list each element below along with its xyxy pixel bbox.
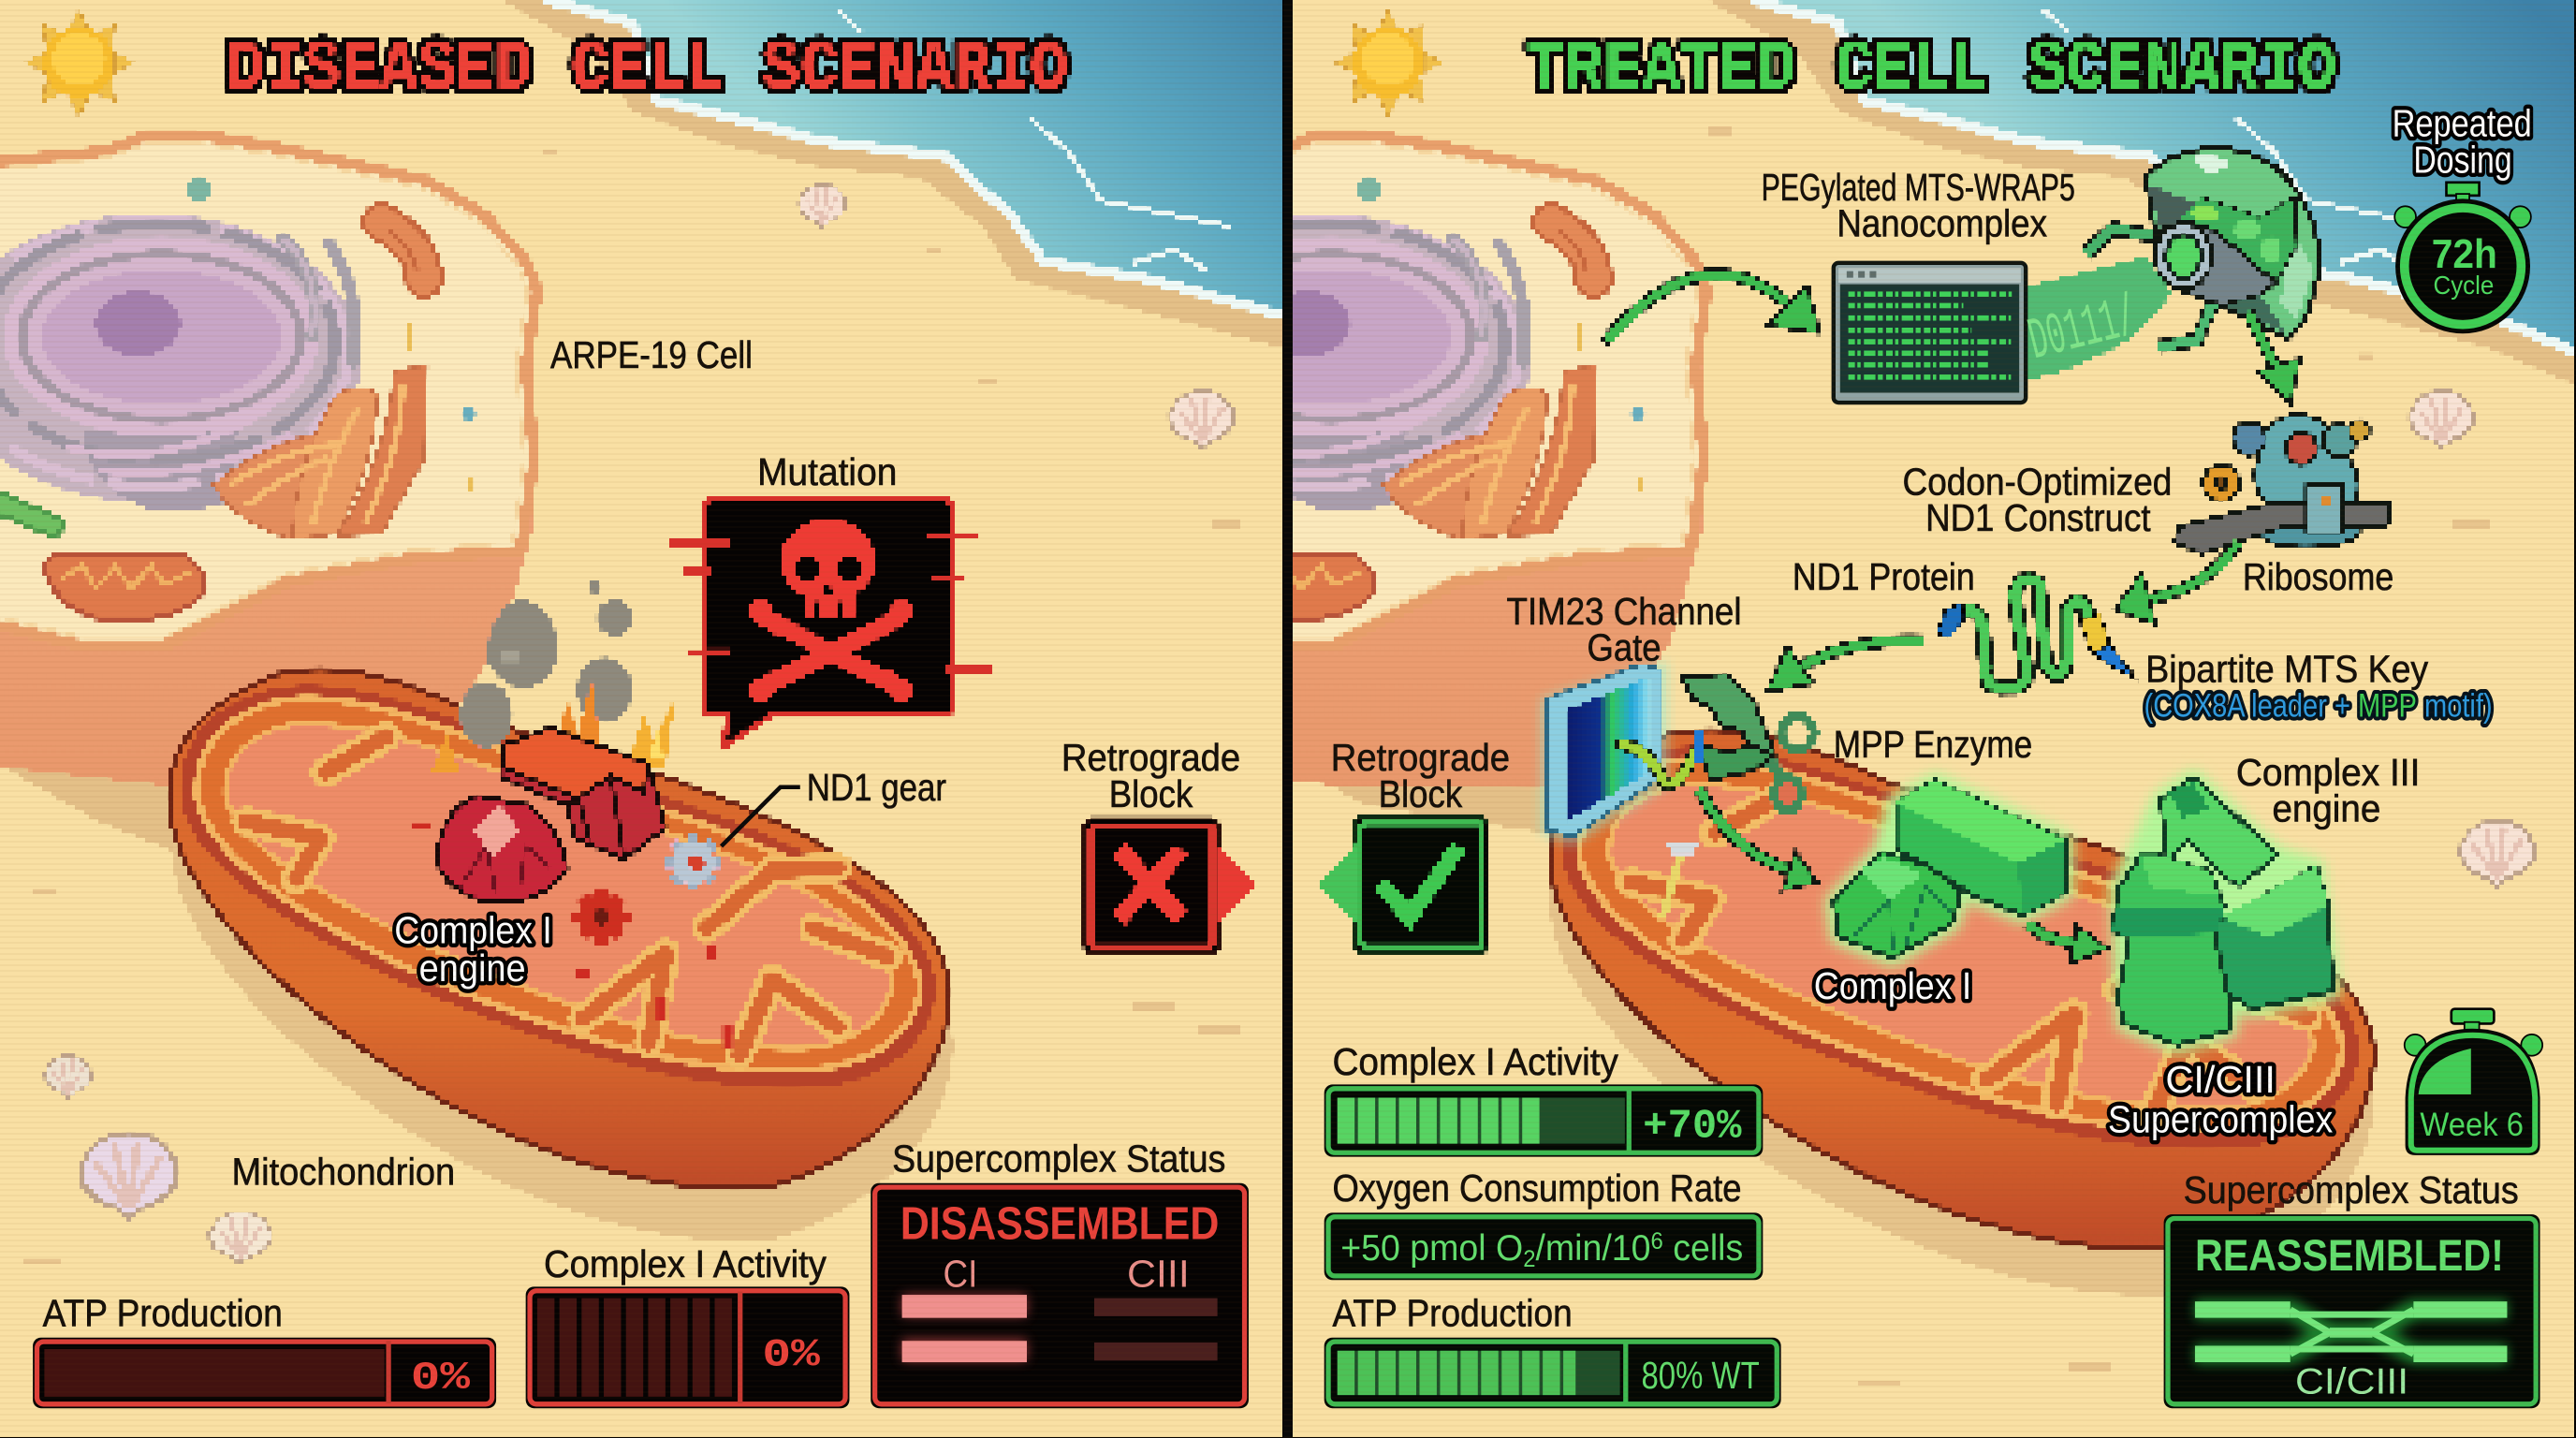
label: supercomplex status: Supercomplex Status bbox=[892, 1137, 1225, 1180]
green CI/CIII supercomplex bbox=[2113, 777, 2333, 1045]
flames bbox=[431, 681, 675, 772]
panel: treated cell scene art bbox=[1071, 0, 2576, 1438]
HUD: supercomplex status (disassembled) bbox=[871, 1183, 1249, 1408]
label: Complex III engine bbox=[2236, 751, 2420, 830]
HUD: ATP production (treated): 80% WT bbox=[1641, 1354, 1760, 1397]
HUD: supercomplex status (reassembled) bbox=[2164, 1214, 2540, 1408]
label: supercomplex status: Supercomplex Status bbox=[2184, 1168, 2519, 1211]
seashells bbox=[44, 183, 1237, 1266]
label: mutation: Mutation bbox=[757, 450, 897, 493]
HUD: supercomplex status (reassembled): REASSEMBLED! bbox=[2195, 1231, 2504, 1281]
arrow: cell to terminal bbox=[1608, 274, 1821, 339]
label: ARPE-19 cell: ARPE-19 Cell bbox=[550, 333, 753, 376]
label: TIM23 channel gate: Gate bbox=[1588, 626, 1661, 669]
label: Complex III engine: engine bbox=[2272, 787, 2380, 830]
protein threading through gate bbox=[1621, 731, 1705, 785]
label: COX8A leader + MPP motif: (COX8A leader + MPP motif) bbox=[2144, 687, 2493, 724]
damage sparks bbox=[411, 822, 733, 1050]
broken Complex I engine bbox=[437, 728, 666, 902]
HUD: ATP production (diseased): 0% bbox=[411, 1356, 471, 1401]
label: retrograde block bbox=[1061, 736, 1240, 815]
mitochondrion bbox=[168, 669, 950, 1188]
icon: 72h cycle stopwatch: 72h bbox=[2432, 231, 2497, 277]
icon: 72h cycle stopwatch: Cycle bbox=[2433, 271, 2494, 300]
leader line: ND1 gear bbox=[722, 787, 800, 846]
icon: mutation speech bubble with skull bbox=[670, 500, 990, 748]
icon: week 6 stopwatch: Week 6 bbox=[2420, 1107, 2524, 1143]
nanobot WRAP5 nanocomplex bbox=[2085, 148, 2320, 346]
sand marks bbox=[1708, 128, 2489, 1387]
shoreline and water bbox=[505, 0, 1282, 346]
bipartite key tips bbox=[1937, 603, 2138, 681]
HUD: Complex I activity (diseased) bbox=[526, 1286, 849, 1408]
label: retrograde block: Retrograde bbox=[1331, 736, 1510, 779]
data ribbon bbox=[2027, 257, 2172, 379]
label: Complex III engine: Complex III bbox=[2236, 751, 2420, 794]
HUD: oxygen consumption rate: /min/10 bbox=[1535, 1228, 1651, 1269]
HUD: supercomplex status (reassembled): CI/CIII bbox=[2295, 1361, 2408, 1401]
label: PEGylated MTS-WRAP5 nanocomplex bbox=[1762, 166, 2075, 245]
green glow behind complexes bbox=[1834, 777, 2333, 1045]
label: codon-optimized ND1 construct: Codon-Optimized bbox=[1903, 460, 2172, 503]
icon: sun bbox=[1336, 10, 1442, 117]
arrow: ribosome to protein bbox=[2115, 542, 2238, 624]
label: PEGylated MTS-WRAP5 nanocomplex: Nanocomplex bbox=[1837, 202, 2047, 245]
label: repeated dosing: Repeated bbox=[2393, 102, 2532, 145]
mitochondrion bbox=[1550, 730, 2374, 1249]
icon: ND1 gear bbox=[666, 835, 722, 890]
HUD: oxygen consumption rate: +50 pmol O bbox=[1340, 1228, 1529, 1269]
arrow: protein to gate bbox=[1766, 640, 1924, 692]
HUD: Complex I activity (diseased): 0% bbox=[762, 1333, 821, 1378]
label: Complex I engine bbox=[394, 908, 552, 990]
green Complex I bbox=[1834, 781, 2065, 958]
sand marks bbox=[24, 148, 1242, 1264]
ground shadow of cell bbox=[1281, 723, 1577, 838]
HUD: ATP production (treated) bbox=[1325, 1338, 1781, 1408]
label: ATP production: ATP Production bbox=[1332, 1291, 1573, 1334]
label: Complex I activity: Complex I Activity bbox=[1332, 1040, 1619, 1083]
label: Complex I: Complex I bbox=[1814, 964, 1971, 1007]
label: repeated dosing: Dosing bbox=[2413, 138, 2512, 181]
label: retrograde block: Retrograde bbox=[1061, 736, 1240, 779]
HUD: oxygen consumption rate: 2 bbox=[1523, 1247, 1535, 1272]
panel: diseased cell scene art bbox=[0, 0, 1282, 1437]
HUD: Complex I activity (treated): +70% bbox=[1643, 1104, 1742, 1151]
smoke bbox=[460, 580, 633, 748]
label: codon-optimized ND1 construct: ND1 Construct bbox=[1925, 496, 2151, 539]
HUD: supercomplex status (disassembled): CIII bbox=[1127, 1252, 1190, 1295]
icon: retrograde block X bbox=[1084, 818, 1257, 953]
label: TIM23 channel gate: TIM23 Channel bbox=[1507, 590, 1742, 633]
HUD: ATP production (diseased) bbox=[33, 1338, 496, 1408]
HUD: supercomplex status (disassembled): CI bbox=[943, 1252, 977, 1295]
icon: sun bbox=[26, 10, 133, 117]
HUD: oxygen consumption rate: cells bbox=[1663, 1228, 1743, 1269]
HUD: oxygen consumption rate: 6 bbox=[1651, 1229, 1663, 1255]
HUD: Complex I activity (treated) bbox=[1325, 1084, 1763, 1157]
label: retrograde block bbox=[1331, 736, 1510, 815]
terminal screen bbox=[1834, 263, 2026, 403]
label: Complex I engine: engine bbox=[419, 946, 526, 990]
mitochondrion shadow bbox=[173, 852, 955, 1240]
icon: broken red gear bbox=[572, 888, 631, 946]
label: PEGylated MTS-WRAP5 nanocomplex: PEGylated MTS-WRAP5 bbox=[1762, 166, 2075, 209]
arrow: nanobot to ribosome bbox=[2247, 312, 2300, 406]
label: ATP production: ATP Production bbox=[43, 1291, 283, 1334]
label: Complex I engine: Complex I bbox=[394, 908, 552, 951]
ARPE-19 cell bbox=[1071, 135, 1707, 788]
shoreline and water bbox=[1707, 0, 2576, 411]
label: mitochondrion: Mitochondrion bbox=[231, 1150, 455, 1193]
label: MPP enzyme: MPP Enzyme bbox=[1834, 723, 2032, 766]
label: retrograde block: Block bbox=[1109, 772, 1193, 815]
label: ND1 protein: ND1 Protein bbox=[1793, 555, 1975, 598]
seashells bbox=[2408, 389, 2537, 888]
label: repeated dosing bbox=[2393, 102, 2532, 181]
tim23 channel gate bbox=[1541, 661, 1668, 844]
ground shadow of cell bbox=[9, 768, 173, 852]
label: CI/CIII supercomplex: Supercomplex bbox=[2108, 1097, 2333, 1140]
HUD: oxygen consumption rate bbox=[1325, 1212, 1763, 1280]
ARPE-19 cell bbox=[0, 135, 537, 788]
label: oxygen consumption rate: Oxygen Consumption Rate bbox=[1332, 1167, 1742, 1210]
mitochondrion shadow bbox=[1550, 776, 2374, 1296]
label: Complex I activity: Complex I Activity bbox=[544, 1242, 827, 1285]
divider between panels bbox=[1283, 0, 1293, 1438]
icon: retrograde block check bbox=[1318, 816, 1488, 953]
label: codon-optimized ND1 construct bbox=[1903, 460, 2172, 539]
ribbon binary text: D0111/ bbox=[2022, 285, 2144, 376]
title: treated: TREATED CELL SCENARIO bbox=[1527, 30, 2336, 111]
nd1 protein strand bbox=[1955, 579, 2097, 687]
label: CI/CIII supercomplex: CI/CIII bbox=[2165, 1058, 2276, 1101]
mpp enzyme scissors bbox=[1682, 674, 1814, 810]
label: ND1 gear: ND1 gear bbox=[807, 766, 946, 809]
ribosome with construct belt bbox=[2174, 414, 2391, 554]
arrow: gate to Complex I bbox=[1699, 788, 1817, 890]
arrow: Complex I to supercomplex bbox=[2027, 923, 2108, 964]
label: TIM23 channel gate bbox=[1507, 590, 1742, 669]
label: ribosome: Ribosome bbox=[2243, 555, 2393, 598]
label: bipartite MTS key: Bipartite MTS Key bbox=[2145, 647, 2429, 690]
label: retrograde block: Block bbox=[1379, 772, 1463, 815]
small repair tool bbox=[1662, 842, 1699, 917]
label: CI/CIII supercomplex bbox=[2108, 1058, 2333, 1140]
icon: 72h cycle stopwatch bbox=[2394, 183, 2531, 333]
HUD: supercomplex status (disassembled): DISASSEMBLED bbox=[900, 1198, 1219, 1249]
title: diseased: DISEASED CELL SCENARIO bbox=[227, 30, 1068, 111]
icon: week 6 stopwatch bbox=[2405, 1009, 2542, 1155]
